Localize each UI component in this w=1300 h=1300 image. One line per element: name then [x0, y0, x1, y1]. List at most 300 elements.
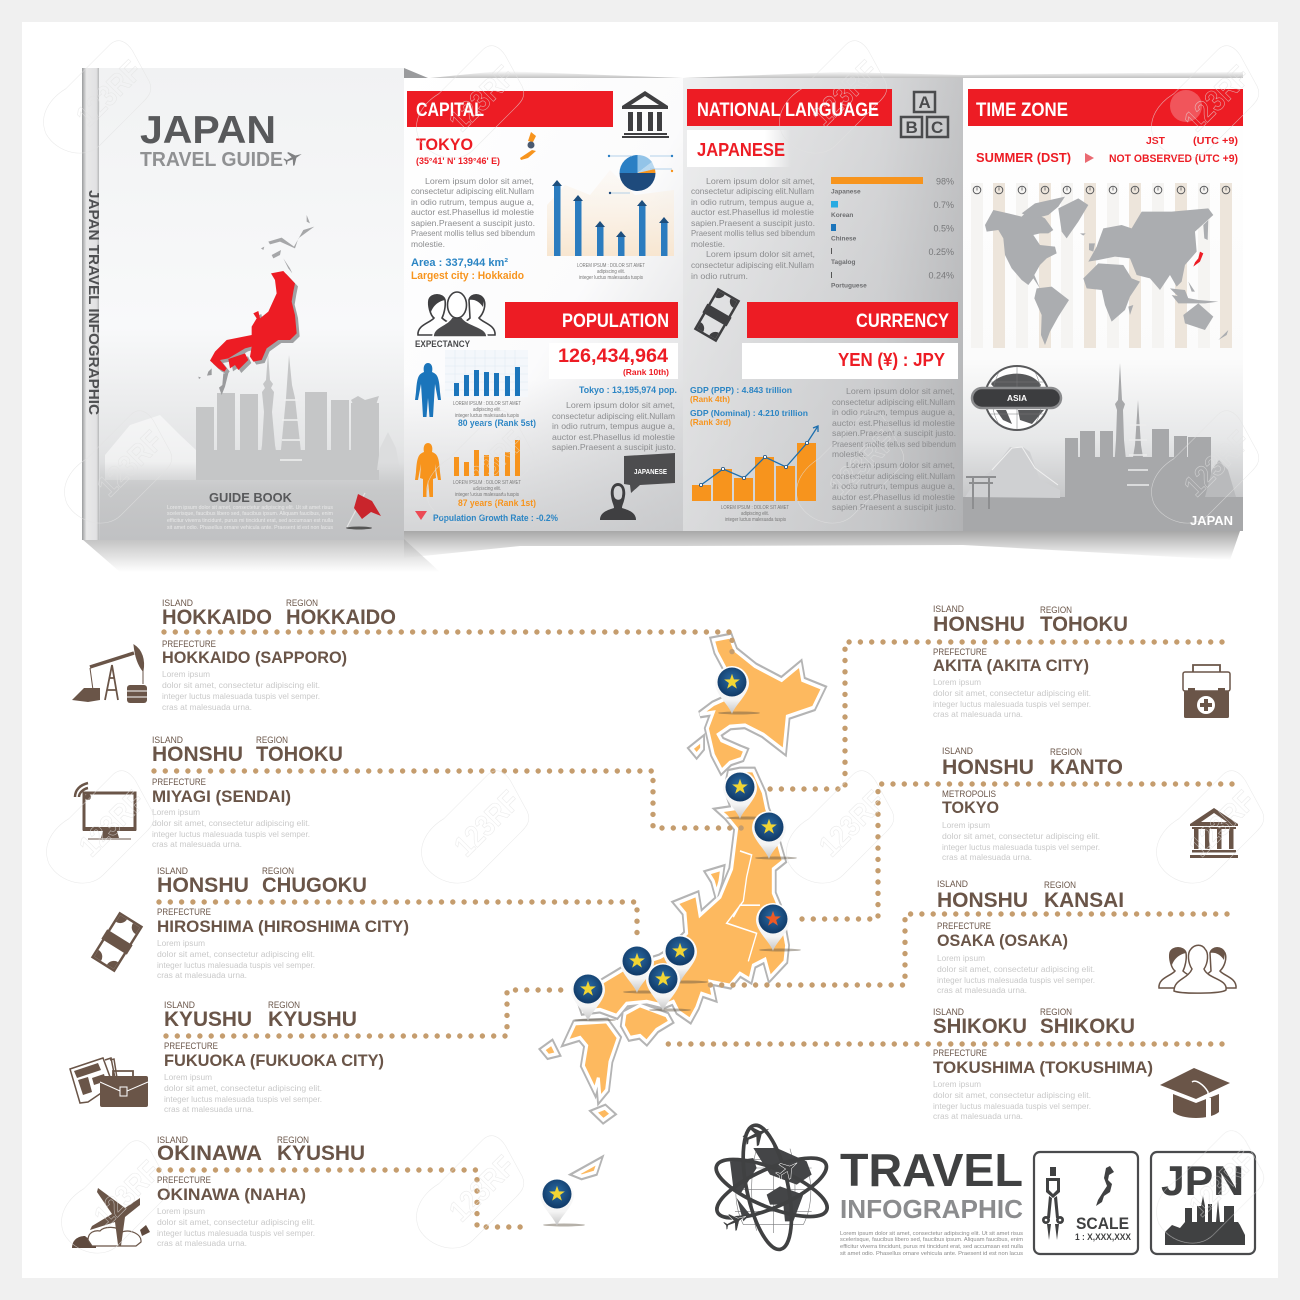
block: Fukuoka: PREFECTURE: [164, 1041, 218, 1051]
dotted connector: Osaka: [708, 914, 1227, 985]
cover blurb: sit amet odio. Phasellus ornare vehicula ante. Praesent id est non lacus: [167, 525, 334, 531]
currency paragraph: auctor est.Phasellus id molestie: [832, 492, 955, 502]
cover blurb: Lorem ipsum dolor sit amet, consectetur adipiscing elit. Ut sit amet risus: [167, 505, 334, 511]
scale box: [1034, 1152, 1138, 1254]
block: Hokkaido: ISLAND: [162, 598, 193, 608]
block: Osaka: KANSAI: [1044, 888, 1124, 912]
block: Tokyo: [942, 746, 1123, 862]
pin: Fukuoka: [571, 973, 616, 1022]
block: Miyagi: [152, 735, 343, 849]
block: Hokkaido: integer luctus malesuada tuspis vel semper.: [162, 692, 320, 701]
chart: language bars: 0.24%: [928, 270, 954, 280]
block: Okinawa: OKINAWA (NAHA): [157, 1185, 306, 1204]
block: Fukuoka: Lorem ipsum: [164, 1073, 212, 1082]
block: Okinawa: KYUSHU: [277, 1141, 365, 1165]
bottom blurb: sit amet odio. Phasellus ornare vehicula ante. Praesent id est non lacus: [840, 1251, 1023, 1257]
GDP caption: adipiscing elit.: [741, 511, 769, 517]
globe with Asia label: [972, 366, 1061, 430]
icon: speech bubble: [624, 453, 675, 493]
block: Tokyo: TOKYO: [942, 798, 999, 817]
cover subtitle: TRAVEL GUIDE: [140, 149, 283, 171]
map shadow: [213, 274, 300, 375]
population number: 126,434,964: [558, 346, 668, 367]
growth marker: [415, 511, 427, 520]
cover mountain: [105, 415, 196, 480]
pin: Miyagi: [752, 811, 797, 860]
block: Hiroshima: integer luctus malesuada tuspis vel semper.: [157, 961, 315, 970]
capital name: TOKYO: [416, 135, 473, 154]
language paragraph: consectetur adipiscing elit.Nullam: [691, 260, 814, 270]
block: Fukuoka: [164, 1000, 384, 1114]
prefecture borders: [727, 851, 760, 961]
block: Akita: cras at malesuada urna.: [933, 710, 1023, 719]
block: Tokushima: SHIKOKU: [1040, 1014, 1135, 1038]
chart: male bars: [445, 350, 528, 397]
GDP nominal rank: (Rank 3rd): [690, 417, 731, 427]
largest city: Largest city : Hokkaido: [411, 270, 524, 282]
JPN box: [1151, 1152, 1255, 1254]
chart: language bars: 0.7%: [933, 200, 954, 210]
block: Tokushima: dolor sit amet, consectetur adipiscing elit.: [933, 1091, 1091, 1100]
block: Tokyo: cras at malesuada urna.: [942, 853, 1032, 862]
block: Akita: AKITA (AKITA CITY): [933, 656, 1089, 675]
block: Miyagi: HONSHU: [152, 742, 243, 766]
block: Hokkaido: PREFECTURE: [162, 639, 216, 649]
block: Miyagi: integer luctus malesuada tuspis vel semper.: [152, 830, 310, 839]
block: Akita: Lorem ipsum: [933, 678, 981, 687]
language paragraph: Lorem ipsum dolor sit amet,: [706, 176, 815, 186]
block: Fukuoka: ISLAND: [164, 1000, 195, 1010]
population heading: POPULATION: [562, 311, 669, 332]
population paragraph: sapien.Praesent a suscipit justo.: [552, 442, 676, 452]
torii gate: [966, 477, 996, 509]
currency box: [742, 343, 958, 379]
block: Tokyo: KANTO: [1050, 755, 1123, 779]
Asia label: ASIA: [1007, 393, 1027, 403]
cover title: JAPAN: [140, 109, 276, 152]
block: Hiroshima: CHUGOKU: [262, 873, 367, 897]
language paragraph: in odio rutrum.: [691, 271, 748, 281]
dotted connector: Tokushima: [662, 1041, 1222, 1047]
spine text: JAPAN TRAVEL INFOGRAPHIC: [85, 190, 102, 415]
JPN label: JPN: [1161, 1157, 1244, 1204]
icon: map silhouette: [1096, 1166, 1114, 1206]
scale value: 1 : X,XXX,XXX: [1075, 1232, 1131, 1242]
currency paragraph: [832, 386, 956, 512]
block: Tokushima: integer luctus malesuada tuspis vel semper.: [933, 1102, 1091, 1111]
currency paragraph: in odio rutrum, tempus augue a,: [832, 481, 955, 491]
icon: plane and clouds: [72, 1188, 150, 1248]
block: Miyagi: TOHOKU: [256, 742, 343, 766]
summer offset: NOT OBSERVED (UTC +9): [1109, 153, 1238, 165]
capital paragraph: [411, 176, 535, 249]
arrow: [1085, 153, 1094, 163]
JPN skyline: [1165, 1196, 1245, 1245]
block: Hokkaido: HOKKAIDO: [162, 605, 272, 629]
block: Miyagi: Lorem ipsum: [152, 808, 200, 817]
bottom title: travel: TRAVEL: [840, 1144, 1023, 1196]
chart caption: integer luctus malesuada tuspis: [579, 275, 643, 281]
currency paragraph: auctor est.Phasellus id molestie: [832, 418, 955, 428]
block: Osaka: ISLAND: [937, 879, 968, 889]
block: Hiroshima: dolor sit amet, consectetur adipiscing elit.: [157, 950, 315, 959]
block: Okinawa: OKINAWA: [157, 1141, 262, 1165]
block: Hokkaido: REGION: [286, 598, 318, 608]
icon: people group: [1159, 945, 1236, 993]
capital paragraph: in odio rutrum, tempus augue a,: [411, 197, 534, 207]
currency paragraph: consectetur adipiscing elit.Nullam: [832, 471, 955, 481]
language paragraph: auctor est.Phasellus id molestie: [691, 207, 814, 217]
block: Osaka: cras at malesuada urna.: [937, 986, 1027, 995]
chart: pie: [608, 155, 673, 194]
block: Osaka: REGION: [1044, 880, 1076, 890]
pin: Akita: [723, 771, 768, 820]
capital heading bar: [407, 91, 613, 127]
expectancy label: EXPECTANCY: [415, 339, 470, 349]
bottom title: infographic: INFOGRAPHIC: [840, 1194, 1023, 1224]
icon: people: [418, 292, 495, 337]
dotted connector: Okinawa: [159, 1170, 527, 1227]
language paragraph: Praesent mollis tellus sed bibendum: [691, 228, 815, 238]
block: Miyagi: ISLAND: [152, 735, 183, 745]
block: Hiroshima: PREFECTURE: [157, 907, 211, 917]
rank: (Rank 10th): [623, 367, 669, 377]
cover ground: [100, 462, 404, 540]
block: Tokushima: SHIKOKU: [933, 1014, 1027, 1038]
pin: Tokushima: [646, 963, 691, 1012]
population box: [549, 343, 678, 379]
Japan on world map: [1193, 252, 1203, 267]
block: Hiroshima: [157, 866, 409, 980]
capital paragraph: consectetur adipiscing elit.Nullam: [411, 186, 534, 196]
currency paragraph: Lorem ipsum dolor sit amet,: [846, 460, 955, 470]
block: Hiroshima: Lorem ipsum: [157, 939, 205, 948]
red Honshu: [210, 271, 297, 372]
time zone heading: TIME ZONE: [976, 100, 1068, 121]
language box: [687, 130, 791, 167]
map pins: [540, 666, 801, 1226]
male caption: integer luctus malesuada tuspis: [455, 413, 519, 419]
currency paragraph: Lorem ipsum dolor sit amet,: [846, 386, 955, 396]
bottom skyline: [963, 363, 1243, 531]
icon: plane: [282, 147, 305, 168]
small southern islands: [198, 368, 228, 395]
icon: speaker: [600, 483, 636, 520]
chart: language bars: 0.25%: [928, 247, 954, 257]
Japan footer label: JAPAN: [1190, 513, 1233, 528]
pin: Hiroshima: [620, 945, 665, 994]
dotted connector: Miyagi: [154, 771, 748, 828]
growth rate: Population Growth Rate : -0.2%: [433, 513, 558, 523]
population heading bar: [505, 302, 678, 338]
coordinates: (35°41' N' 139°46' E): [416, 156, 500, 167]
icon: red flag: [346, 493, 381, 530]
book spine: [82, 68, 100, 540]
capital paragraph: molestie.: [411, 239, 445, 249]
watermark spot on bar: [1170, 90, 1202, 122]
currency name: YEN (¥) : JPY: [838, 350, 945, 370]
block: Tokushima: [933, 1007, 1153, 1121]
bottom blurb: [840, 1231, 1024, 1257]
cover face: [99, 68, 404, 540]
female caption: integer luctus malesuada tuspis: [455, 492, 519, 498]
block: Tokushima: REGION: [1040, 1007, 1072, 1017]
block: Miyagi: REGION: [256, 735, 288, 745]
block: Fukuoka: cras at malesuada urna.: [164, 1105, 254, 1114]
currency paragraph: molestie.: [832, 449, 866, 459]
female caption: adipiscing elit.: [473, 486, 501, 492]
clocks: [973, 186, 1230, 194]
icon: medical kit: [1183, 665, 1230, 718]
dotted connector: Tokyo: [797, 784, 1232, 919]
language name: JAPANESE: [697, 140, 785, 160]
GDP caption: LOREM IPSUM : DOLOR SIT AMET: [721, 505, 789, 511]
block: Hiroshima: REGION: [262, 866, 294, 876]
block: Tokyo: Lorem ipsum: [942, 821, 990, 830]
block: Okinawa: ISLAND: [157, 1135, 188, 1145]
block: Hokkaido: dolor sit amet, consectetur adipiscing elit.: [162, 681, 320, 690]
logo: travel globe: [709, 1119, 834, 1254]
capital paragraph: Praesent mollis tellus sed bibendum: [411, 228, 535, 238]
panel: time zone: [963, 89, 1243, 531]
icon: mini map: [520, 132, 536, 160]
language paragraph: sapien.Praesent a suscipit justo.: [691, 218, 815, 228]
block: Tokyo: integer luctus malesuada tuspis vel semper.: [942, 843, 1100, 852]
cover blurb: [167, 505, 334, 531]
language heading: NATIONAL LANGUAGE: [697, 100, 879, 121]
northern islands: [261, 215, 314, 273]
currency paragraph: consectetur adipiscing elit.Nullam: [832, 397, 955, 407]
pin: Hokkaido: [715, 666, 760, 714]
block: Akita: integer luctus malesuada tuspis vel semper.: [933, 700, 1091, 709]
cover map of Japan: [198, 215, 314, 395]
population paragraph: Lorem ipsum dolor sit amet,: [566, 400, 675, 410]
block: Akita: ISLAND: [933, 604, 964, 614]
icon: oil pump: [72, 645, 147, 703]
block: Okinawa: REGION: [277, 1135, 309, 1145]
icon: money: [693, 287, 741, 343]
dotted connector: Hokkaido: [164, 632, 732, 660]
block: Tokushima: TOKUSHIMA (TOKUSHIMA): [933, 1058, 1153, 1077]
block: Hokkaido: HOKKAIDO: [286, 605, 396, 629]
panel: inner pages background: [404, 68, 1243, 531]
time zone heading bar: [968, 89, 1243, 126]
icon: ABC blocks: A: [918, 93, 931, 112]
panel: book cover: [82, 68, 404, 540]
block: Tokyo: REGION: [1050, 747, 1082, 757]
block: Fukuoka: KYUSHU: [164, 1007, 252, 1031]
panel: national language: [687, 89, 954, 290]
chart: language bars: Chinese: [831, 236, 857, 242]
chart: language bars: 0.5%: [933, 224, 954, 234]
language heading bar: [687, 89, 892, 126]
block: Fukuoka: KYUSHU: [268, 1007, 357, 1031]
block: Hiroshima: HONSHU: [157, 873, 249, 897]
time zone stripes: [971, 183, 1232, 348]
block: Akita: PREFECTURE: [933, 647, 987, 657]
cover tower lattice: [280, 400, 302, 460]
GDP caption: integer luctus malesuada tuspis: [725, 517, 786, 523]
icon: ABC blocks: C: [931, 118, 943, 137]
block: Akita: TOHOKU: [1040, 612, 1128, 636]
block: Osaka: dolor sit amet, consectetur adipiscing elit.: [937, 965, 1095, 974]
Asia pill: [972, 388, 1061, 408]
chart: language bars: 98%: [936, 176, 954, 186]
block: Okinawa: dolor sit amet, consectetur adipiscing elit.: [157, 1218, 315, 1227]
female caption: [453, 480, 521, 498]
male caption: adipiscing elit.: [473, 407, 501, 413]
GDP PPP: GDP (PPP) : 4.843 trillion: [690, 385, 792, 395]
block: Osaka: Lorem ipsum: [937, 954, 985, 963]
page shadows: [82, 71, 1243, 572]
map of Japan: [543, 637, 823, 1176]
male caption: LOREM IPSUM : DOLOR SIT AMET: [453, 401, 521, 407]
block: Akita: dolor sit amet, consectetur adipiscing elit.: [933, 689, 1091, 698]
dotted connector: Fukuoka: [166, 990, 565, 1036]
male expectancy: 80 years (Rank 5st): [458, 418, 536, 429]
world map: [985, 197, 1228, 345]
icon: museum: [1190, 808, 1238, 858]
language paragraph: [691, 176, 815, 281]
population paragraph: in odio rutrum, tempus augue a,: [552, 421, 675, 431]
block: Osaka: HONSHU: [937, 888, 1028, 912]
block: Miyagi: cras at malesuada urna.: [152, 840, 242, 849]
block: Tokushima: cras at malesuada urna.: [933, 1112, 1023, 1121]
icon: ABC blocks: B: [906, 118, 918, 137]
icon: newspaper and briefcase: [70, 1058, 148, 1107]
currency paragraph: sapien.Praesent a suscipit justo.: [832, 502, 956, 512]
bottom blurb: Lorem ipsum dolor sit amet, consectetur adipiscing elit. Ut sit amet risus: [840, 1231, 1023, 1237]
block: Okinawa: cras at malesuada urna.: [157, 1239, 247, 1248]
GDP caption: [721, 505, 789, 523]
JST label: JST: [1146, 135, 1166, 147]
capital heading: CAPITAL: [416, 100, 484, 121]
block: Fukuoka: FUKUOKA (FUKUOKA CITY): [164, 1051, 384, 1070]
icon: bank: [622, 91, 669, 138]
Fuji outline: [992, 447, 1058, 485]
block: Hiroshima: ISLAND: [157, 866, 188, 876]
block: Akita: REGION: [1040, 605, 1072, 615]
block: Miyagi: dolor sit amet, consectetur adipiscing elit.: [152, 819, 310, 828]
block: Miyagi: MIYAGI (SENDAI): [152, 787, 291, 806]
block: Okinawa: PREFECTURE: [157, 1175, 211, 1185]
block: Fukuoka: dolor sit amet, consectetur adipiscing elit.: [164, 1084, 322, 1093]
tower lattice: [1127, 425, 1149, 485]
icon: wifi monitor: [75, 783, 136, 839]
currency paragraph: in odio rutrum, tempus augue a,: [832, 407, 955, 417]
population paragraph: auctor est.Phasellus id molestie: [552, 432, 675, 442]
block: Tokyo: HONSHU: [942, 755, 1034, 779]
tokyo population: Tokyo : 13,195,974 pop.: [579, 385, 677, 396]
population paragraph: consectetur adipiscing elit.Nullam: [552, 411, 675, 421]
block: Fukuoka: REGION: [268, 1000, 300, 1010]
pin: Tokyo: [756, 903, 801, 952]
icon: male figure: [415, 363, 441, 417]
GDP PPP rank: (Rank 4th): [690, 394, 730, 404]
block: Tokushima: ISLAND: [933, 1007, 964, 1017]
block: Fukuoka: integer luctus malesuada tuspis vel semper.: [164, 1095, 322, 1104]
area: Area : 337,944 km²: [411, 257, 508, 269]
capital paragraph: auctor est.Phasellus id molestie: [411, 207, 534, 217]
icon: female figure: [415, 443, 441, 497]
block: Osaka: integer luctus malesuada tuspis vel semper.: [937, 976, 1095, 985]
chart caption: [577, 263, 645, 281]
block: Osaka: OSAKA (OSAKA): [937, 931, 1068, 950]
language paragraph: Lorem ipsum dolor sit amet,: [706, 249, 815, 259]
block: Akita: HONSHU: [933, 612, 1025, 636]
chart: language bars: Japanese: [831, 188, 861, 196]
cover skyline: [196, 353, 400, 480]
block: Tokyo: ISLAND: [942, 746, 973, 756]
dotted connector: Hiroshima: [159, 902, 637, 940]
scale label: SCALE: [1076, 1214, 1129, 1233]
chart caption: LOREM IPSUM : DOLOR SIT AMET: [577, 263, 645, 269]
block: Okinawa: Lorem ipsum: [157, 1207, 205, 1216]
block: Akita: [933, 604, 1128, 719]
language paragraph: in odio rutrum, tempus augue a,: [691, 197, 814, 207]
currency heading bar: [747, 302, 958, 338]
guide book label: GUIDE BOOK: [209, 490, 293, 505]
summer label: SUMMER (DST): [976, 151, 1071, 165]
currency paragraph: Praesent mollis tellus sed bibendum: [832, 439, 956, 449]
block: Hiroshima: HIROSHIMA (HIROSHIMA CITY): [157, 917, 409, 936]
block: Okinawa: integer luctus malesuada tuspis vel semper.: [157, 1229, 315, 1238]
capital paragraph: sapien.Praesent a suscipit justo.: [411, 218, 535, 228]
cover blurb: efficitur viverra tincidunt, purus mi tincidunt erat, sed accumsan est nulla: [167, 518, 333, 524]
pin: Okinawa: [540, 1178, 585, 1226]
JST offset: (UTC +9): [1193, 135, 1238, 147]
female expectancy: 87 years (Rank 1st): [458, 498, 536, 509]
bottom blurb: scelerisque, faucibus libero sed, faucibus ipsum. Aliquam faucibus, enim: [840, 1237, 1023, 1243]
dotted connector: Akita: [767, 642, 1222, 789]
block: Tokushima: Lorem ipsum: [933, 1080, 981, 1089]
block: Hiroshima: cras at malesuada urna.: [157, 971, 247, 980]
block: Hokkaido: cras at malesuada urna.: [162, 703, 252, 712]
icon: ABC blocks: [901, 92, 948, 137]
chart: language bars: Tagalog: [831, 259, 855, 266]
block: Hokkaido: Lorem ipsum: [162, 670, 210, 679]
panel: population: [415, 292, 678, 523]
block: Okinawa: [157, 1135, 365, 1248]
pin: Osaka: [663, 935, 708, 984]
chart: female bars: [454, 440, 520, 476]
icon: speech bubble: JAPANESE: [634, 469, 667, 476]
chart caption: adipiscing elit.: [597, 269, 625, 275]
block: Tokyo: METROPOLIS: [942, 789, 996, 799]
male caption: [453, 401, 521, 419]
female caption: LOREM IPSUM : DOLOR SIT AMET: [453, 480, 521, 486]
bottom blurb: efficitur viverra tincidunt, purus mi tincidunt erat, sed accumsan est nulla: [840, 1244, 1024, 1250]
chart: language bars: Portuguese: [831, 282, 867, 290]
icon: banknotes: [90, 911, 144, 973]
capital paragraph: Lorem ipsum dolor sit amet,: [425, 176, 534, 186]
population paragraph: [552, 400, 676, 452]
currency heading: CURRENCY: [856, 311, 949, 332]
chart: language bars: Korean: [831, 212, 853, 219]
block: Tokushima: PREFECTURE: [933, 1048, 987, 1058]
panel: currency: [690, 287, 958, 523]
block: Hokkaido: [162, 598, 396, 712]
chart: arrow bars: [547, 170, 674, 256]
language paragraph: consectetur adipiscing elit.Nullam: [691, 186, 814, 196]
language paragraph: molestie.: [691, 239, 725, 249]
cover blurb: scelerisque, faucibus libero sed, faucibus ipsum. Aliquam faucibus, enim: [167, 511, 333, 517]
currency paragraph: sapien.Praesent a suscipit justo.: [832, 428, 956, 438]
block: Hokkaido: HOKKAIDO (SAPPORO): [162, 648, 347, 667]
block: Tokyo: dolor sit amet, consectetur adipiscing elit.: [942, 832, 1100, 841]
block: Miyagi: PREFECTURE: [152, 777, 206, 787]
block: Osaka: [937, 879, 1124, 995]
